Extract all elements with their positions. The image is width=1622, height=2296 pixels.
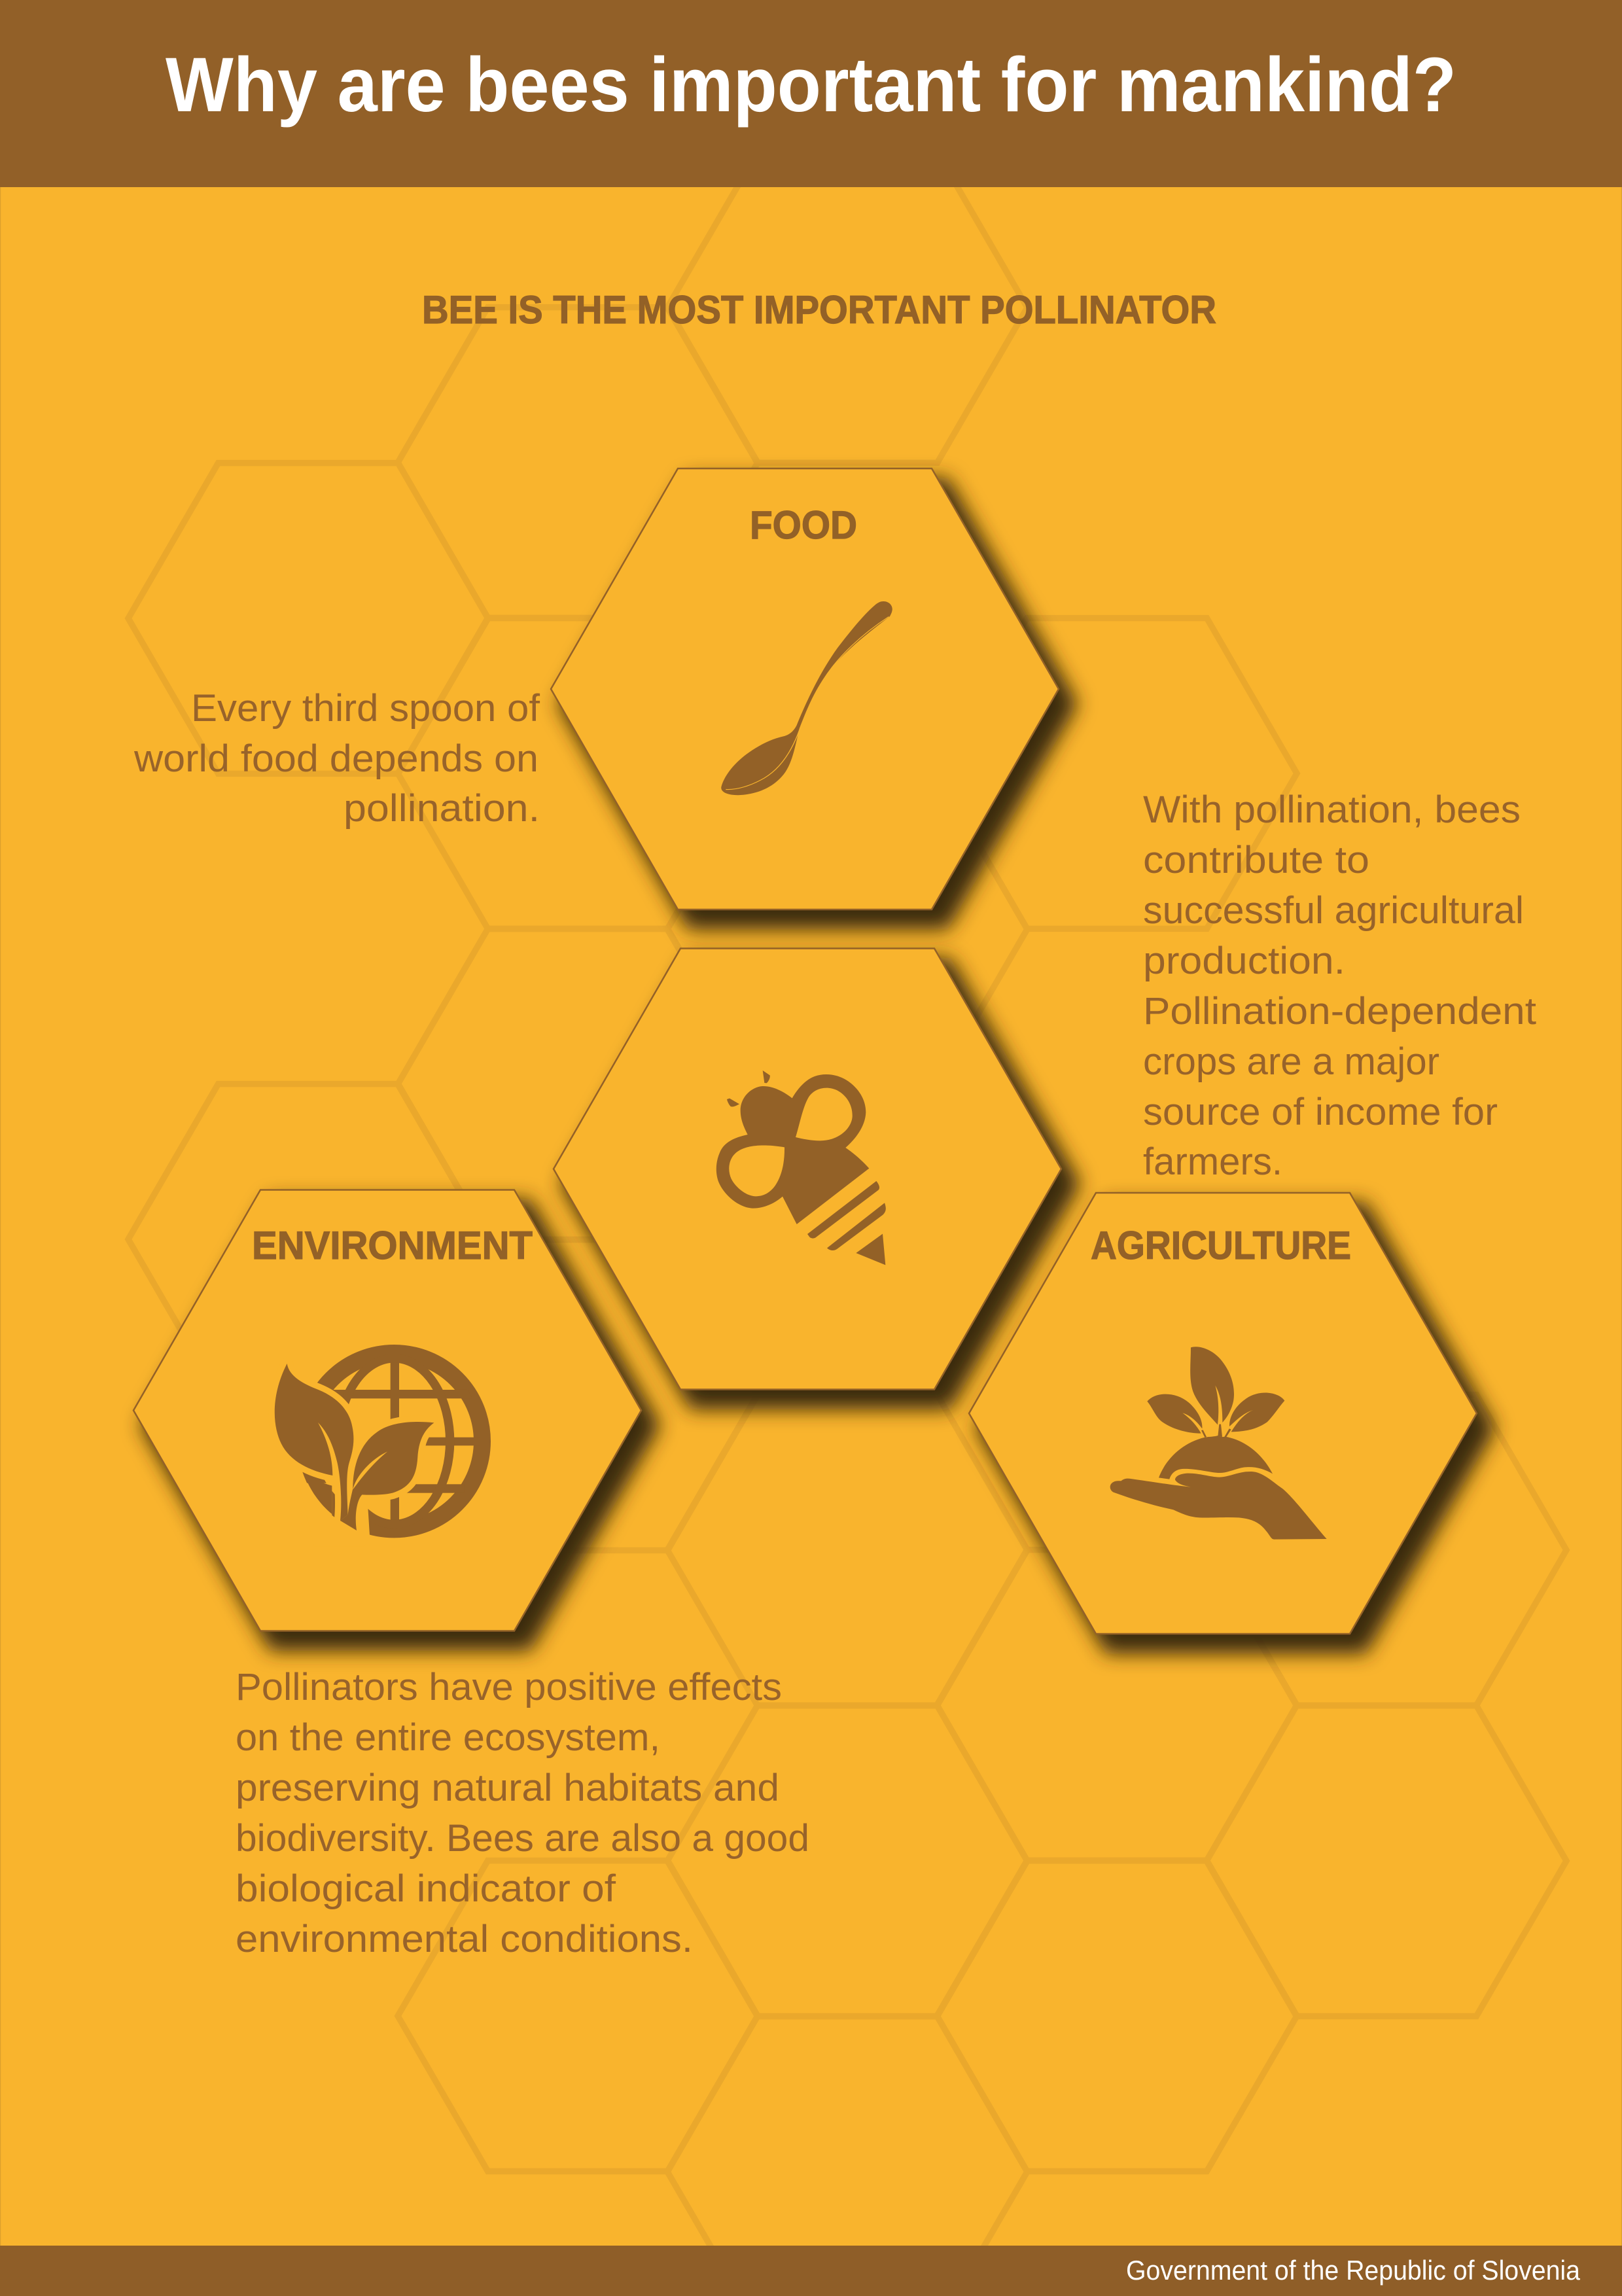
text block: environment: biodiversity. Bees are also a good (236, 1817, 809, 1860)
icon: hand holding plant (1110, 1347, 1327, 1540)
text block: agriculture: contribute to (1143, 839, 1369, 881)
footer bar (0, 2246, 1622, 2296)
text block: environment: preserving natural habitats and (236, 1767, 779, 1809)
header banner (0, 0, 1622, 187)
icon: spoon (721, 601, 892, 795)
text block: food: pollination. (344, 787, 540, 830)
text block: agriculture: farmers. (1143, 1140, 1282, 1183)
text block: environment (236, 1666, 809, 1960)
text block: agriculture: successful agricultural (1143, 889, 1524, 932)
text block: agriculture (1143, 788, 1536, 1183)
text block: environment: Pollinators have positive effects (236, 1666, 782, 1708)
text block: agriculture: Pollination-dependent (1143, 990, 1536, 1033)
text block: agriculture: production. (1143, 940, 1345, 982)
text block: environment: on the entire ecosystem, (236, 1716, 660, 1759)
text block: food: Every third spoon of (191, 687, 540, 730)
icon: bee (716, 1070, 886, 1265)
text block: food (133, 687, 540, 830)
panel: food hexagon (551, 468, 1072, 924)
text block: agriculture: crops are a major (1143, 1040, 1439, 1083)
text block: environment: environmental conditions. (236, 1918, 693, 1960)
heading: food: FOOD (750, 503, 857, 547)
heading: agriculture: AGRICULTURE (1091, 1224, 1351, 1267)
heading: environment: ENVIRONMENT (252, 1224, 533, 1267)
icon: globe with leaves (275, 1353, 482, 1546)
panel: agriculture hexagon (969, 1193, 1490, 1649)
panel: central bee hexagon (554, 949, 1074, 1404)
title: Why are bees important for mankind? (166, 42, 1456, 128)
footer credit: Government of the Republic of Slovenia (1126, 2255, 1581, 2286)
text block: environment: biological indicator of (236, 1867, 616, 1910)
text block: agriculture: With pollination, bees (1143, 788, 1521, 831)
subtitle heading: BEE IS THE MOST IMPORTANT POLLINATOR (422, 288, 1216, 332)
panel: environment hexagon (133, 1190, 654, 1646)
text block: agriculture: source of income for (1143, 1091, 1498, 1133)
text block: food: world food depends on (133, 737, 538, 780)
